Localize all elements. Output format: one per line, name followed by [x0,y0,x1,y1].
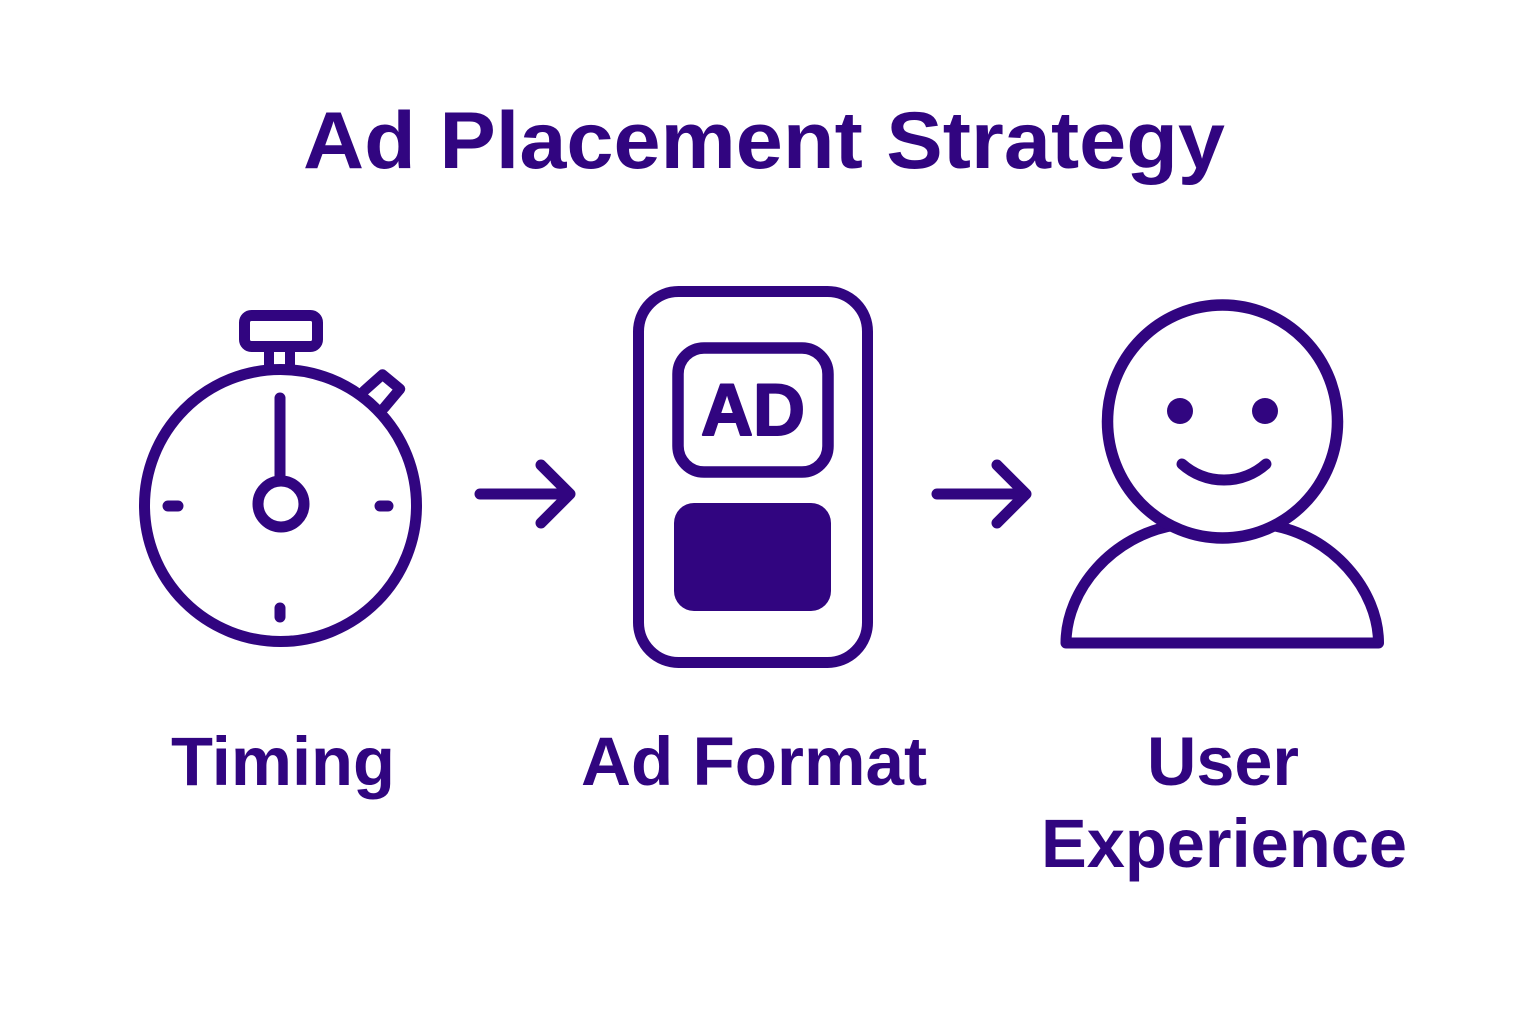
arrow: ad format to user experience [937,465,1026,523]
arrow: timing to ad format [480,465,570,523]
ad label: AD [701,370,805,451]
label: timing: Timing [171,723,395,800]
label: user experience [1041,723,1407,882]
icon: smiling user [1066,305,1378,643]
label: user experience: User [1147,723,1299,800]
filled ad block [674,503,831,611]
icon: stopwatch [144,316,416,642]
label: ad format: Ad Format [581,723,927,800]
icon: phone with ad [638,292,868,662]
title: Ad Placement Strategy [303,96,1225,186]
label: user experience: Experience [1041,805,1407,882]
